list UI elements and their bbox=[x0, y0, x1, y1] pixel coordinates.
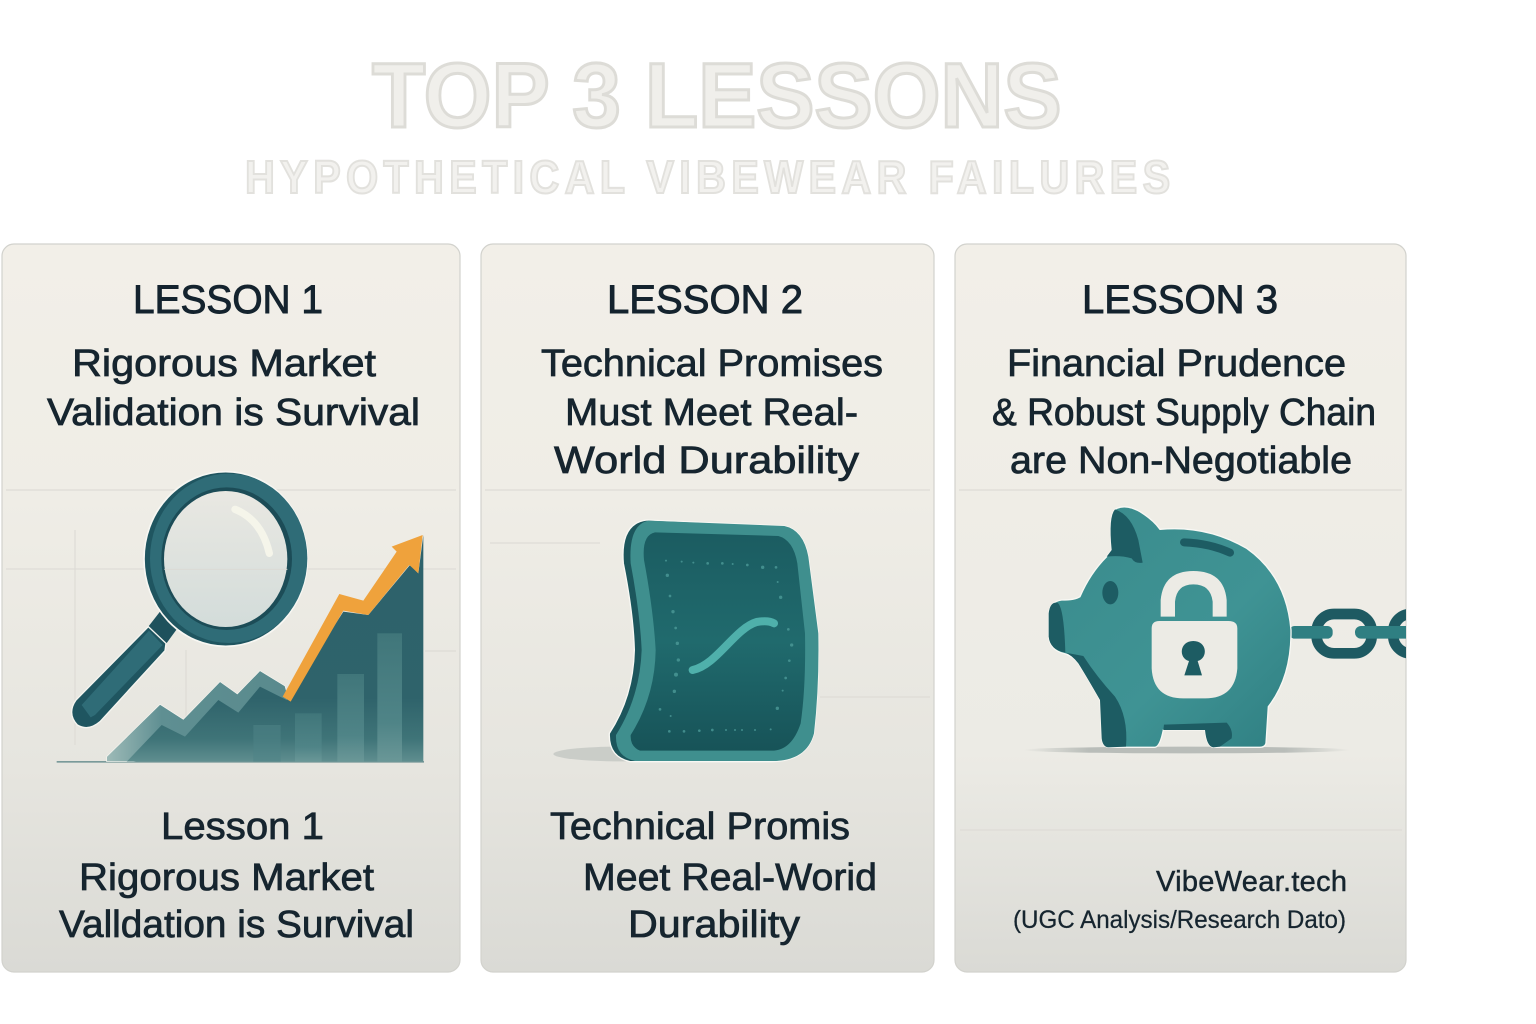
padlock bbox=[1152, 571, 1237, 698]
source note bbox=[1013, 866, 1347, 934]
lesson 2 heading: Must Meet Real- bbox=[565, 392, 858, 434]
patch rim bbox=[616, 521, 818, 761]
ground shadow bbox=[553, 747, 687, 761]
panel: lesson 2 bbox=[481, 244, 934, 972]
card background bbox=[955, 244, 1406, 972]
card background bbox=[2, 244, 460, 972]
lesson 3 heading: Financial Prudence bbox=[1007, 343, 1346, 385]
lesson 2 summary: Technical Promis bbox=[550, 806, 850, 848]
lesson 3 heading: & Robust Supply Chain bbox=[992, 392, 1376, 434]
pig eye bbox=[1102, 581, 1118, 604]
panel: lesson 3 bbox=[955, 244, 1448, 972]
lesson 1 heading: Validation is Survival bbox=[47, 392, 420, 434]
patch screen bbox=[631, 532, 805, 751]
pig body bbox=[1049, 507, 1291, 747]
bars bbox=[253, 633, 402, 762]
lesson 1 heading bbox=[47, 343, 420, 434]
lesson 1 heading: Rigorous Market bbox=[72, 343, 376, 385]
icon: magnifying glass over rising chart bbox=[57, 472, 424, 763]
coin slot bbox=[1184, 542, 1230, 553]
lesson 1 label: LESSON 1 bbox=[133, 278, 323, 322]
orange trend arrow bbox=[283, 535, 423, 702]
patch back edge bbox=[609, 520, 818, 762]
source note: (UGC Analysis/Research Dato) bbox=[1013, 906, 1346, 934]
lesson 2 heading bbox=[541, 343, 883, 482]
pig shading bbox=[1049, 509, 1232, 747]
lesson 1 summary: Lesson 1 bbox=[161, 806, 324, 848]
lesson 2 label: LESSON 2 bbox=[607, 278, 803, 322]
light area band bbox=[107, 671, 290, 762]
keyhole bbox=[1182, 641, 1205, 675]
lesson 2 heading: World Durability bbox=[554, 440, 859, 482]
lesson 3 heading: are Non-Negotiable bbox=[1010, 440, 1352, 482]
lesson 3 label: LESSON 3 bbox=[1082, 278, 1278, 322]
chart baseline bbox=[57, 761, 424, 763]
lesson 1 summary: Rigorous Market bbox=[79, 857, 374, 899]
card background bbox=[481, 244, 934, 972]
lesson 2 summary: Meet Real-Worid bbox=[583, 857, 877, 899]
signal curve bbox=[693, 621, 774, 670]
chain bbox=[1289, 614, 1448, 653]
source note: VibeWear.tech bbox=[1156, 866, 1347, 898]
lesson 1 summary bbox=[59, 806, 414, 946]
magnifier ring bbox=[144, 472, 307, 646]
lens highlight bbox=[235, 509, 269, 553]
icon: locked piggy bank with chain bbox=[1034, 506, 1406, 754]
ground shadow bbox=[1023, 747, 1350, 753]
lens bbox=[164, 491, 287, 627]
lesson 2 heading: Technical Promises bbox=[541, 343, 883, 385]
subtitle: HYPOTHETICAL VIBEWEAR FAILURES bbox=[245, 152, 1170, 204]
dark area bbox=[127, 535, 423, 762]
lesson 2 summary: Durability bbox=[628, 904, 800, 946]
main heading: TOP 3 LESSONS bbox=[372, 45, 1062, 148]
lesson 1 summary: Valldation is Survival bbox=[59, 904, 414, 946]
title bbox=[245, 45, 1170, 204]
magnifier handle bbox=[72, 612, 177, 728]
icon: flexible wearable patch bbox=[553, 520, 818, 762]
panel: lesson 1 bbox=[2, 244, 460, 972]
lesson 3 heading bbox=[992, 343, 1376, 482]
sensor dots bbox=[659, 560, 793, 733]
lesson 2 summary bbox=[550, 806, 877, 946]
